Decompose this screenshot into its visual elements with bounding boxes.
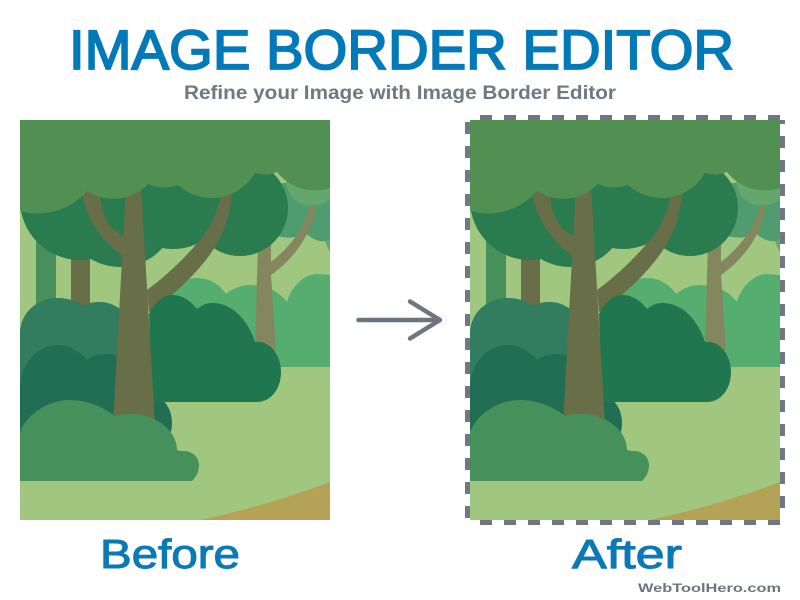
watermark: WebToolHero.com	[638, 581, 781, 595]
before image: forest scene	[20, 120, 338, 520]
after image: forest scene with dashed border	[468, 118, 788, 522]
after image scene	[470, 120, 788, 520]
dashed border	[468, 118, 782, 522]
subtitle: Refine your Image with Image Border Editor	[184, 82, 616, 104]
arrow	[358, 302, 440, 338]
label: after: After	[572, 531, 682, 577]
label: before: Before	[100, 531, 240, 577]
title: IMAGE BORDER EDITOR	[69, 19, 734, 81]
